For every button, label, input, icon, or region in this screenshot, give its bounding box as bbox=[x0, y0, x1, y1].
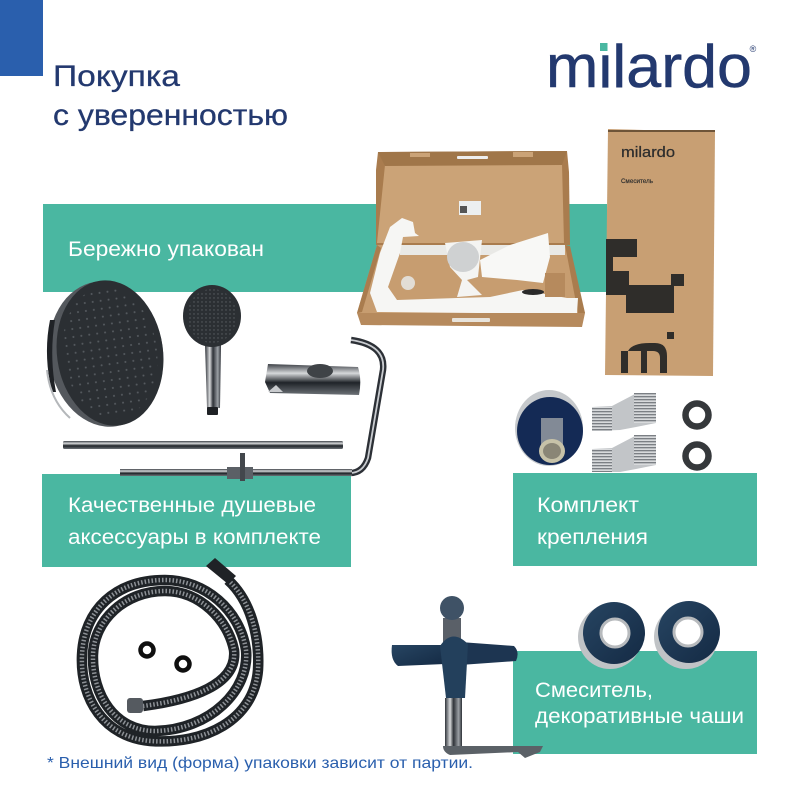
photo: wall flange bbox=[515, 390, 583, 466]
photo: shower bar lower run with slider bbox=[120, 453, 352, 481]
photo: tall branded box: Смеситель bbox=[621, 179, 653, 185]
panel: carefully packed band: Бережно упакован bbox=[68, 237, 264, 261]
panel: mixer and cups: Смеситель, bbox=[535, 678, 653, 702]
panel: shower accessories: Качественные душевые bbox=[68, 493, 316, 517]
blue corner block bbox=[0, 0, 43, 76]
panel: mixer and cups: декоративные чаши bbox=[535, 704, 744, 728]
panel: carefully packed band bbox=[43, 204, 607, 292]
logo: milardo: ® bbox=[750, 44, 757, 54]
photo: shower hose bbox=[82, 558, 258, 741]
panel: mounting kit bbox=[513, 473, 757, 566]
panel: mounting kit: Комплект bbox=[537, 493, 639, 517]
photo: hand shower bbox=[183, 285, 241, 415]
panel: shower accessories: аксессуары в комплекте bbox=[68, 525, 321, 549]
panel: mixer and cups bbox=[513, 651, 757, 754]
photo: decorative cups bbox=[578, 601, 720, 669]
footnote: * Внешний вид (форма) упаковки зависит от партии. bbox=[47, 755, 473, 772]
photo: sliding holder bbox=[265, 364, 360, 395]
photo: open cardboard box bbox=[357, 151, 585, 327]
photo: tall branded box: milardo bbox=[621, 144, 675, 161]
photo: threaded adapters bbox=[592, 393, 656, 472]
photo: rain shower head bbox=[39, 273, 173, 434]
title: с уверенностью bbox=[53, 99, 288, 132]
photo: L-shaped shower bar bbox=[350, 340, 383, 473]
title: Покупка bbox=[53, 60, 180, 93]
title bbox=[53, 60, 288, 132]
photo: straight shower bar bbox=[63, 441, 343, 449]
photo: tall branded box bbox=[605, 129, 715, 376]
photo: faucet mixer bbox=[392, 596, 543, 758]
panel: shower accessories bbox=[42, 474, 351, 567]
panel: mounting kit: крепления bbox=[537, 525, 648, 549]
logo: milardo: milardo bbox=[546, 33, 752, 100]
photo: rubber rings bbox=[686, 404, 708, 468]
